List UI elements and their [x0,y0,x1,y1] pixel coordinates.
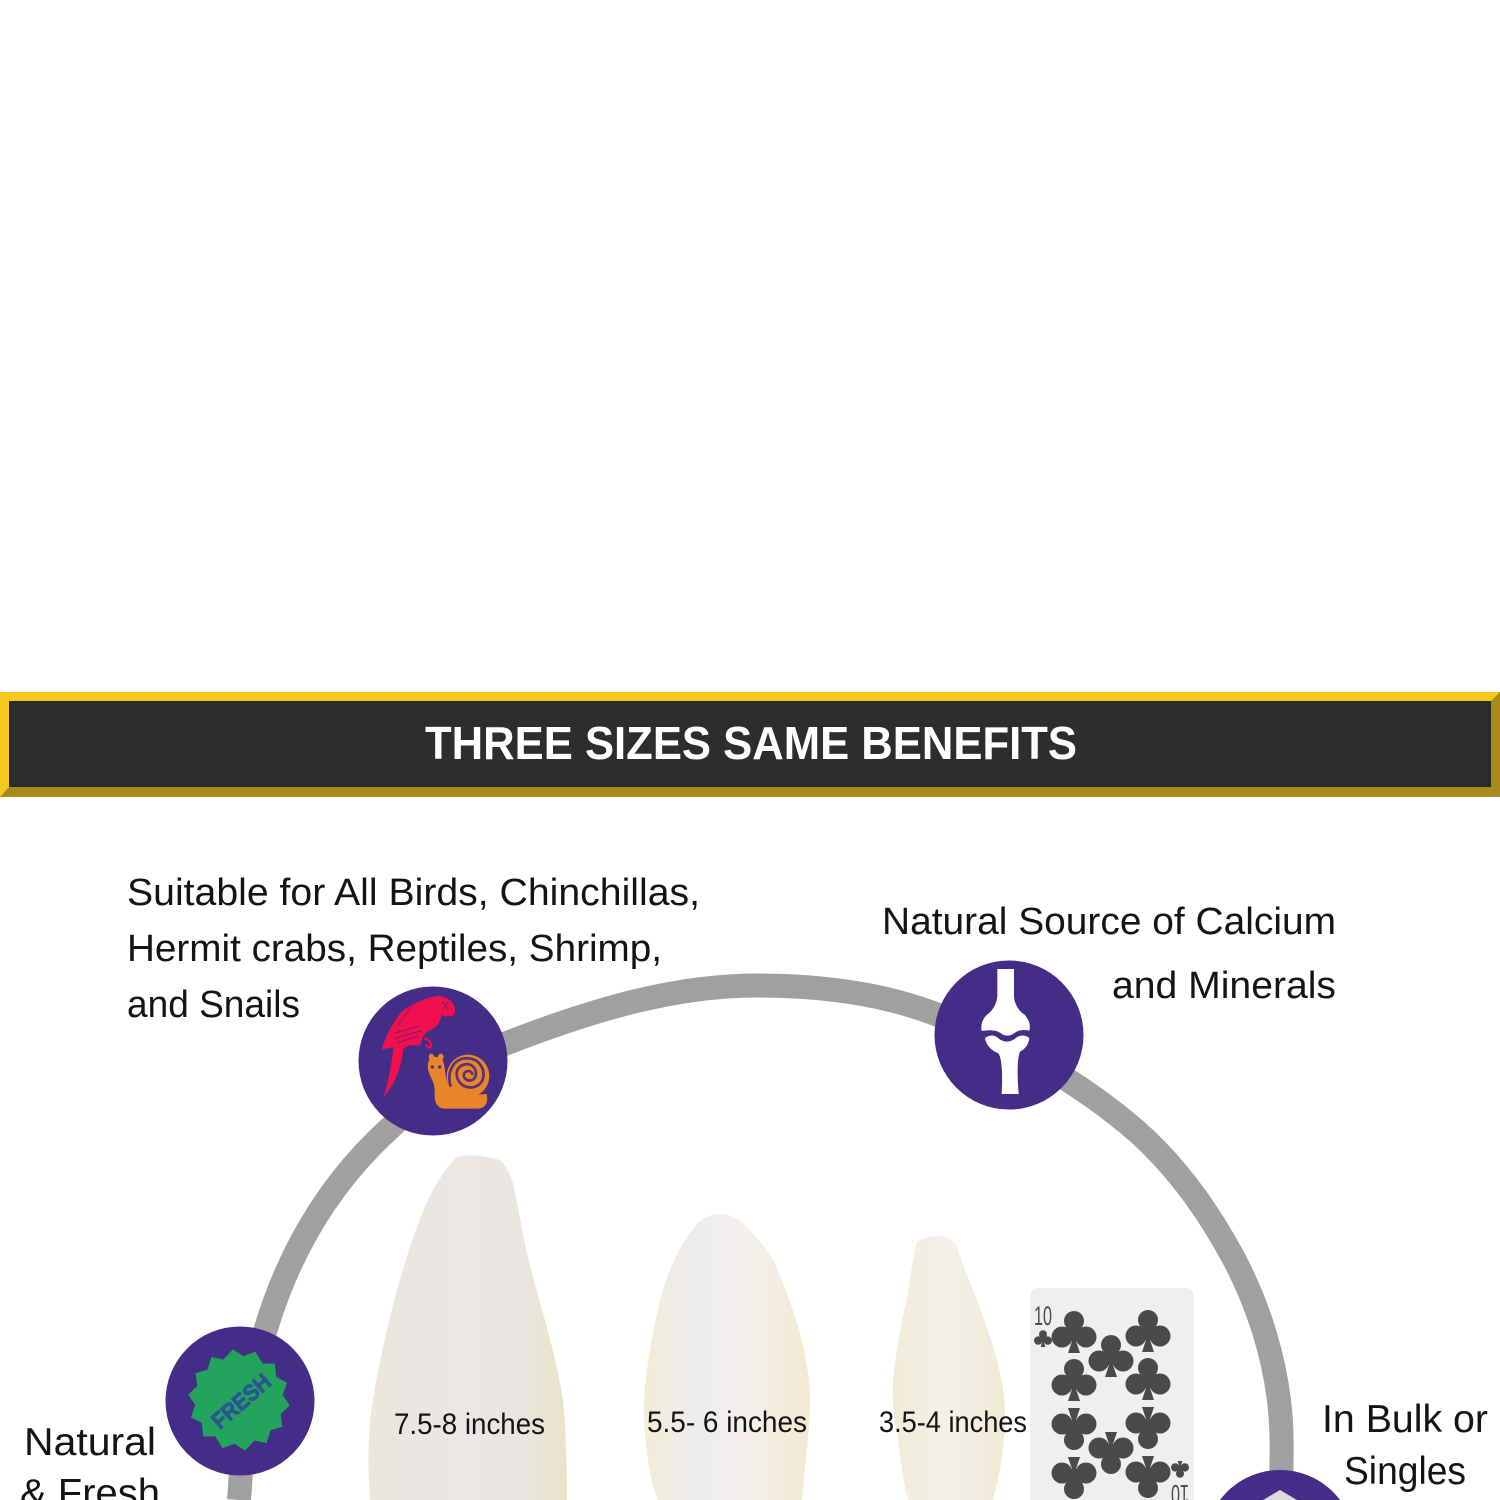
playing card: ten of clubs [1030,1288,1194,1500]
text: suitable for animals: and Snails [127,984,300,1026]
text: natural source of calcium [882,901,1336,1007]
parrot [382,996,455,1097]
icon: fresh badge [166,1326,314,1476]
text: in bulk or singles: In Bulk or [1322,1398,1488,1441]
icon: fresh badge: FRESH [206,1368,276,1434]
text: natural and fresh [20,1421,160,1500]
grey arc connector [239,986,1282,1500]
icon: bulk box [1220,1470,1340,1500]
text: suitable for animals: Hermit crabs, Reptiles, Shrimp, [127,928,662,970]
text: natural source of calcium: Natural Source of Calcium [882,901,1336,943]
cuttlebone: small [893,1236,1005,1500]
cuttlebone: large [368,1156,567,1500]
size label: small: 3.5-4 inches [879,1406,1027,1439]
text: natural and fresh: Natural [24,1421,156,1464]
text: in bulk or singles [1322,1398,1488,1493]
cuttlebone: medium [644,1214,810,1500]
text: natural source of calcium: and Minerals [1112,965,1336,1007]
text: suitable for animals [127,872,700,1026]
banner title: THREE SIZES SAME BENEFITS [425,717,1077,769]
icon: parrot and snail [358,986,508,1136]
size label: medium: 5.5- 6 inches [647,1406,807,1439]
text: suitable for animals: Suitable for All Birds, Chinchillas, [127,872,700,914]
snail [428,1054,489,1109]
size label: large: 7.5-8 inches [394,1408,545,1441]
heading banner [0,692,1500,797]
playing card: ten of clubs: 10 [1034,1301,1052,1331]
text: in bulk or singles: Singles [1344,1450,1466,1493]
icon: knee joint bone [934,960,1084,1110]
